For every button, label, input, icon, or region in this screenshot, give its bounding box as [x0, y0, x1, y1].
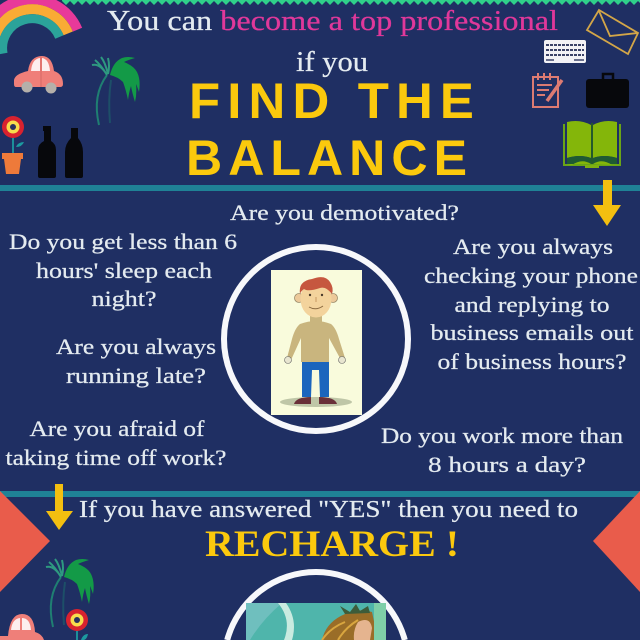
question: phone and emails: Are you always — [453, 234, 613, 259]
answer prompt: If you have answered "YES" then you need to — [79, 497, 578, 523]
icon: palm tree — [92, 57, 140, 125]
diamond left — [0, 491, 50, 592]
question: phone and emails: business emails out — [430, 320, 634, 345]
question: sleep — [9, 229, 237, 311]
question: phone and emails: checking your phone — [424, 263, 638, 288]
icon: bottles — [38, 126, 83, 178]
heading: recharge: RECHARGE ! — [205, 524, 459, 565]
icon: envelope — [587, 10, 638, 54]
circle portrait: recharge — [227, 572, 405, 640]
icon: car — [14, 56, 63, 94]
portrait background — [271, 270, 362, 415]
icon: flower lower — [66, 609, 88, 640]
top green zigzag border — [62, 0, 640, 5]
icon: palm tree lower — [46, 559, 94, 627]
icon: briefcase — [586, 74, 629, 108]
question: running late: Are you always — [56, 334, 216, 359]
diamond right — [593, 491, 640, 592]
icon: rainbow — [0, 0, 78, 57]
arrow: down to questions — [593, 180, 621, 226]
question: phone and emails: and replying to — [454, 292, 610, 317]
question: work hours: 8 hours a day? — [428, 452, 586, 477]
icon: notepad — [533, 73, 562, 107]
heading: find the: FIND THE — [189, 73, 481, 129]
question: demotivated: Are you demotivated? — [230, 200, 459, 225]
question: running late — [56, 334, 216, 388]
recharge illustration — [246, 603, 386, 640]
arrow: down to recharge — [46, 484, 73, 530]
title line one: You can become a top professional — [107, 5, 558, 37]
illustrated man — [280, 277, 352, 407]
question: time off: Are you afraid of — [30, 416, 205, 441]
question: work hours: Do you work more than — [381, 423, 623, 448]
heading: balance: BALANCE — [186, 130, 473, 186]
question: sleep: hours' sleep each — [36, 258, 212, 283]
circle portrait: man — [224, 247, 408, 431]
icon: open book — [564, 121, 620, 168]
question: phone and emails: of business hours? — [438, 349, 626, 374]
title line two: if you — [296, 46, 368, 78]
question: running late: running late? — [66, 363, 206, 388]
divider band two — [0, 491, 640, 497]
question: sleep: night? — [92, 286, 156, 311]
icon: flower pot — [2, 116, 24, 174]
question: sleep: Do you get less than 6 — [9, 229, 237, 254]
question: work hours — [381, 423, 623, 477]
question: time off: taking time off work? — [6, 445, 227, 470]
divider band one — [0, 185, 640, 191]
question: phone and emails — [424, 234, 638, 374]
icon: car lower — [0, 614, 44, 640]
icon: keyboard — [544, 40, 586, 63]
question: time off — [6, 416, 227, 470]
